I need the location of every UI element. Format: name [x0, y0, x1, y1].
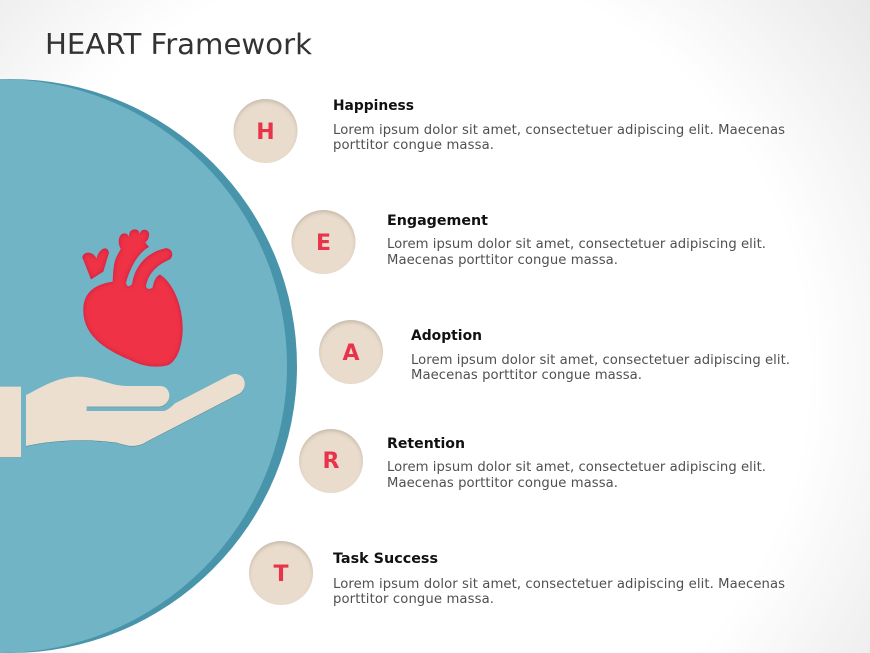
- item: Task Success badge: [249, 541, 313, 605]
- item: Happiness badge: H: [256, 120, 275, 145]
- item: Retention badge: R: [323, 449, 340, 474]
- item: Task Success text: [333, 551, 785, 607]
- item: Retention text: Maecenas porttitor congue massa.: [387, 476, 618, 491]
- item: Task Success text: Task Success: [333, 551, 438, 567]
- item: Engagement badge: E: [316, 231, 331, 256]
- title: HEART Framework: [45, 28, 312, 61]
- item: Happiness text: Happiness: [333, 98, 414, 114]
- item: Happiness badge: [234, 99, 298, 163]
- item: Engagement text: Maecenas porttitor congue massa.: [387, 253, 618, 268]
- item: Happiness text: [333, 98, 785, 153]
- item: Task Success badge: T: [273, 562, 289, 587]
- item: Adoption badge: A: [342, 341, 360, 366]
- item: Happiness text: porttitor congue massa.: [333, 138, 494, 153]
- item: Adoption text: [411, 328, 790, 383]
- item: Adoption text: Adoption: [411, 328, 482, 344]
- item: Engagement badge: [292, 210, 356, 274]
- item: Task Success text: porttitor congue massa.: [333, 592, 494, 607]
- item: Adoption text: Lorem ipsum dolor sit amet, consectetuer adipiscing elit.: [411, 353, 790, 368]
- item: Task Success text: Lorem ipsum dolor sit amet, consectetuer adipiscing elit. Maecenas: [333, 577, 785, 592]
- item: Engagement text: Engagement: [387, 213, 488, 229]
- item: Retention text: Retention: [387, 436, 465, 452]
- item: Adoption badge: [319, 320, 383, 384]
- item: Engagement text: Lorem ipsum dolor sit amet, consectetuer adipiscing elit.: [387, 237, 766, 252]
- item: Retention text: [387, 436, 766, 491]
- panel: teal half circle: [0, 79, 297, 653]
- item: Adoption text: Maecenas porttitor congue massa.: [411, 368, 642, 383]
- item: Retention text: Lorem ipsum dolor sit amet, consectetuer adipiscing elit.: [387, 460, 766, 475]
- icon: hand: [0, 374, 245, 457]
- item: Happiness text: Lorem ipsum dolor sit amet, consectetuer adipiscing elit. Maecenas: [333, 123, 785, 138]
- icon: heart: [82, 229, 183, 367]
- item: Retention badge: [299, 429, 363, 493]
- item: Engagement text: [387, 213, 766, 268]
